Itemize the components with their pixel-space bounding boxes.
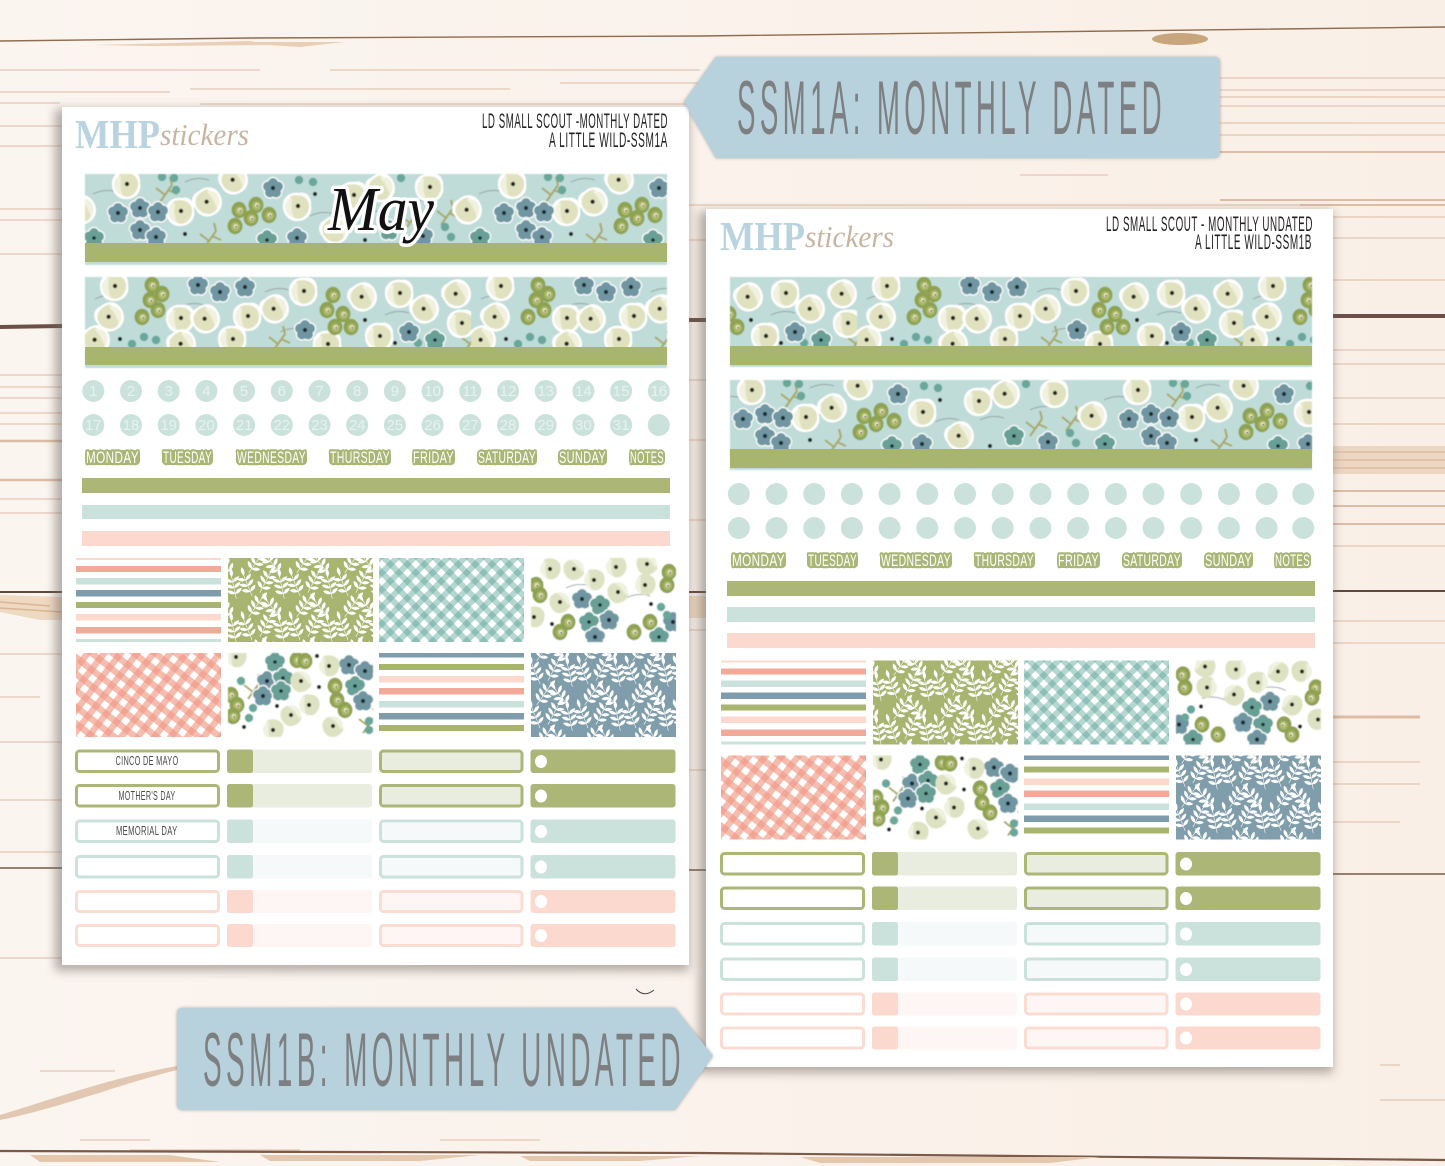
date circles: 25 [387, 417, 403, 434]
weekday labels: SATURDAY [1123, 552, 1181, 570]
sticker sheet: SSM1A monthly dated: A LITTLE WILD-SSM1A [549, 129, 668, 152]
date circles: 15 [613, 383, 629, 400]
date circles: 21 [236, 417, 252, 434]
weekday labels [731, 552, 1311, 570]
date circles: 30 [575, 417, 592, 434]
May title: May [327, 176, 434, 244]
date circles: 23 [311, 417, 328, 434]
sticker sheet: SSM1A monthly dated: LD SMALL SCOUT -MONTHLY DATED [482, 110, 668, 133]
weekday labels: FRIDAY [1058, 552, 1099, 570]
weekday labels: TUESDAY [163, 449, 212, 467]
date circles: 11 [463, 383, 478, 400]
callout tag: SSM1B monthly undated [177, 1008, 713, 1110]
date circles: 29 [537, 417, 554, 434]
solid colour bars [82, 478, 670, 546]
weekday labels: FRIDAY [413, 449, 454, 467]
date circles [82, 380, 670, 436]
date circles: 22 [273, 417, 290, 434]
date circles: 19 [160, 417, 177, 434]
date circles: 5 [240, 383, 248, 400]
date circles: 6 [278, 383, 286, 400]
date circles: 3 [165, 383, 173, 400]
date circles: 9 [391, 383, 399, 400]
date circles: 14 [575, 383, 592, 400]
weekday labels: TUESDAY [808, 552, 857, 570]
sheet shadow [55, 109, 689, 971]
sheet title [482, 110, 668, 152]
date circles: 1 [89, 383, 97, 400]
date circles: 12 [500, 383, 516, 400]
date circles: 27 [462, 417, 479, 434]
logo: MHP [720, 213, 805, 259]
weekday labels: THURSDAY [330, 449, 390, 467]
weekday labels: NOTES [1275, 552, 1310, 570]
sticker sheet: SSM1A monthly dated [55, 107, 689, 971]
logo [720, 213, 894, 259]
sticker sheet: SSM1B monthly undated [699, 209, 1333, 1073]
date circles: 28 [500, 417, 516, 434]
sheet paper [62, 107, 689, 965]
sheet title [1106, 213, 1313, 254]
event sticker rows: MEMORIAL DAY [116, 824, 178, 838]
date circles: 18 [123, 417, 139, 434]
date circles: 16 [650, 383, 667, 400]
logo: stickers [805, 219, 894, 254]
date circles: 31 [613, 417, 629, 434]
pattern tiles [76, 558, 676, 737]
event sticker rows [76, 750, 676, 947]
date circles: 17 [85, 417, 102, 434]
sheet paper [706, 209, 1333, 1067]
solid colour bars [727, 581, 1315, 648]
weekday labels: MONDAY [732, 552, 785, 570]
date circles: 7 [315, 383, 324, 400]
floral tile [1176, 660, 1321, 744]
weekday labels: THURSDAY [975, 552, 1034, 570]
floral washi strip [85, 277, 667, 368]
floral washi strip [730, 277, 1312, 367]
pattern tiles [721, 660, 1321, 840]
date circles: 20 [198, 417, 215, 434]
weekday labels: SATURDAY [478, 449, 536, 467]
logo: stickers [160, 117, 249, 152]
date circles: 4 [202, 383, 211, 400]
event sticker rows [722, 852, 1320, 1050]
date circles: 24 [349, 417, 366, 434]
logo [75, 111, 249, 157]
date circles: 8 [353, 383, 361, 400]
weekday labels: NOTES [630, 449, 664, 467]
date circles: 10 [424, 383, 441, 400]
weekday labels: SUNDAY [559, 449, 606, 467]
weekday labels: WEDNESDAY [237, 449, 306, 467]
sheet shadow [699, 211, 1333, 1073]
weekday labels [85, 449, 665, 467]
date circles: 13 [537, 383, 554, 400]
weekday labels: MONDAY [86, 449, 139, 467]
blank date circles [728, 483, 1314, 539]
event sticker rows: CINCO DE MAYO [116, 754, 178, 768]
weekday labels: WEDNESDAY [881, 552, 951, 570]
floral washi strip with May title [85, 174, 667, 265]
sticker sheet: SSM1B monthly undated: A LITTLE WILD-SSM1B [1195, 231, 1312, 254]
floral washi strip [730, 380, 1312, 470]
weekday labels: SUNDAY [1205, 552, 1252, 570]
logo: MHP [75, 111, 160, 157]
date circles: 26 [424, 417, 441, 434]
event sticker rows: MOTHER'S DAY [118, 789, 176, 803]
callout tag: SSM1A monthly dated [684, 57, 1220, 158]
date circles: 2 [127, 383, 135, 400]
